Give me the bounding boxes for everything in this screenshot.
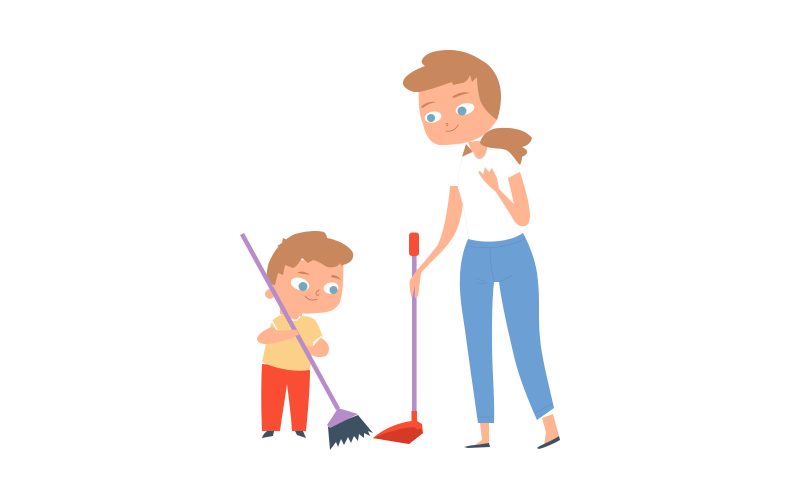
woman right arm and hand [478, 167, 530, 226]
woman hair [403, 50, 501, 120]
broom [242, 234, 373, 450]
boy neck [280, 305, 302, 320]
woman right eye [454, 101, 476, 117]
woman shoes [464, 436, 560, 449]
woman nose and mouth [446, 123, 458, 131]
boy hair tuft [277, 238, 287, 248]
woman shirt [458, 148, 524, 244]
woman's hand on handle [410, 270, 421, 298]
woman jeans seams [468, 239, 552, 417]
boy hand on broom [273, 330, 299, 338]
boy shirt [262, 314, 323, 371]
woman left arm [410, 186, 463, 298]
boy nose and mouth [305, 290, 319, 300]
boy figure [257, 231, 353, 438]
woman neck [468, 140, 487, 159]
dustpan with handle [373, 232, 423, 444]
woman jeans [460, 233, 554, 423]
boy face [272, 258, 343, 314]
broom bristles [328, 415, 373, 450]
dustpan handle [412, 254, 417, 412]
boy shoes [262, 431, 306, 438]
dustpan grip [409, 232, 419, 256]
woman figure [403, 50, 560, 449]
boy ear [265, 289, 275, 299]
woman face [419, 70, 497, 145]
woman ponytail [480, 128, 532, 165]
broom handle [242, 234, 338, 409]
boy collar and sleeve trim [272, 314, 322, 343]
boy left arm [302, 338, 329, 357]
boy left eye [289, 275, 311, 293]
woman left eye [424, 110, 442, 124]
woman hair behind neck [462, 144, 473, 157]
broom head [327, 408, 358, 428]
boy right eye [323, 281, 339, 295]
boy pants [261, 364, 310, 431]
woman ankles [472, 414, 559, 447]
boy right arm [257, 327, 299, 344]
boy brows [298, 272, 341, 280]
boy hair [267, 231, 353, 285]
dustpan shade [373, 427, 423, 444]
dustpan pan [373, 411, 423, 444]
woman brows [421, 92, 470, 108]
